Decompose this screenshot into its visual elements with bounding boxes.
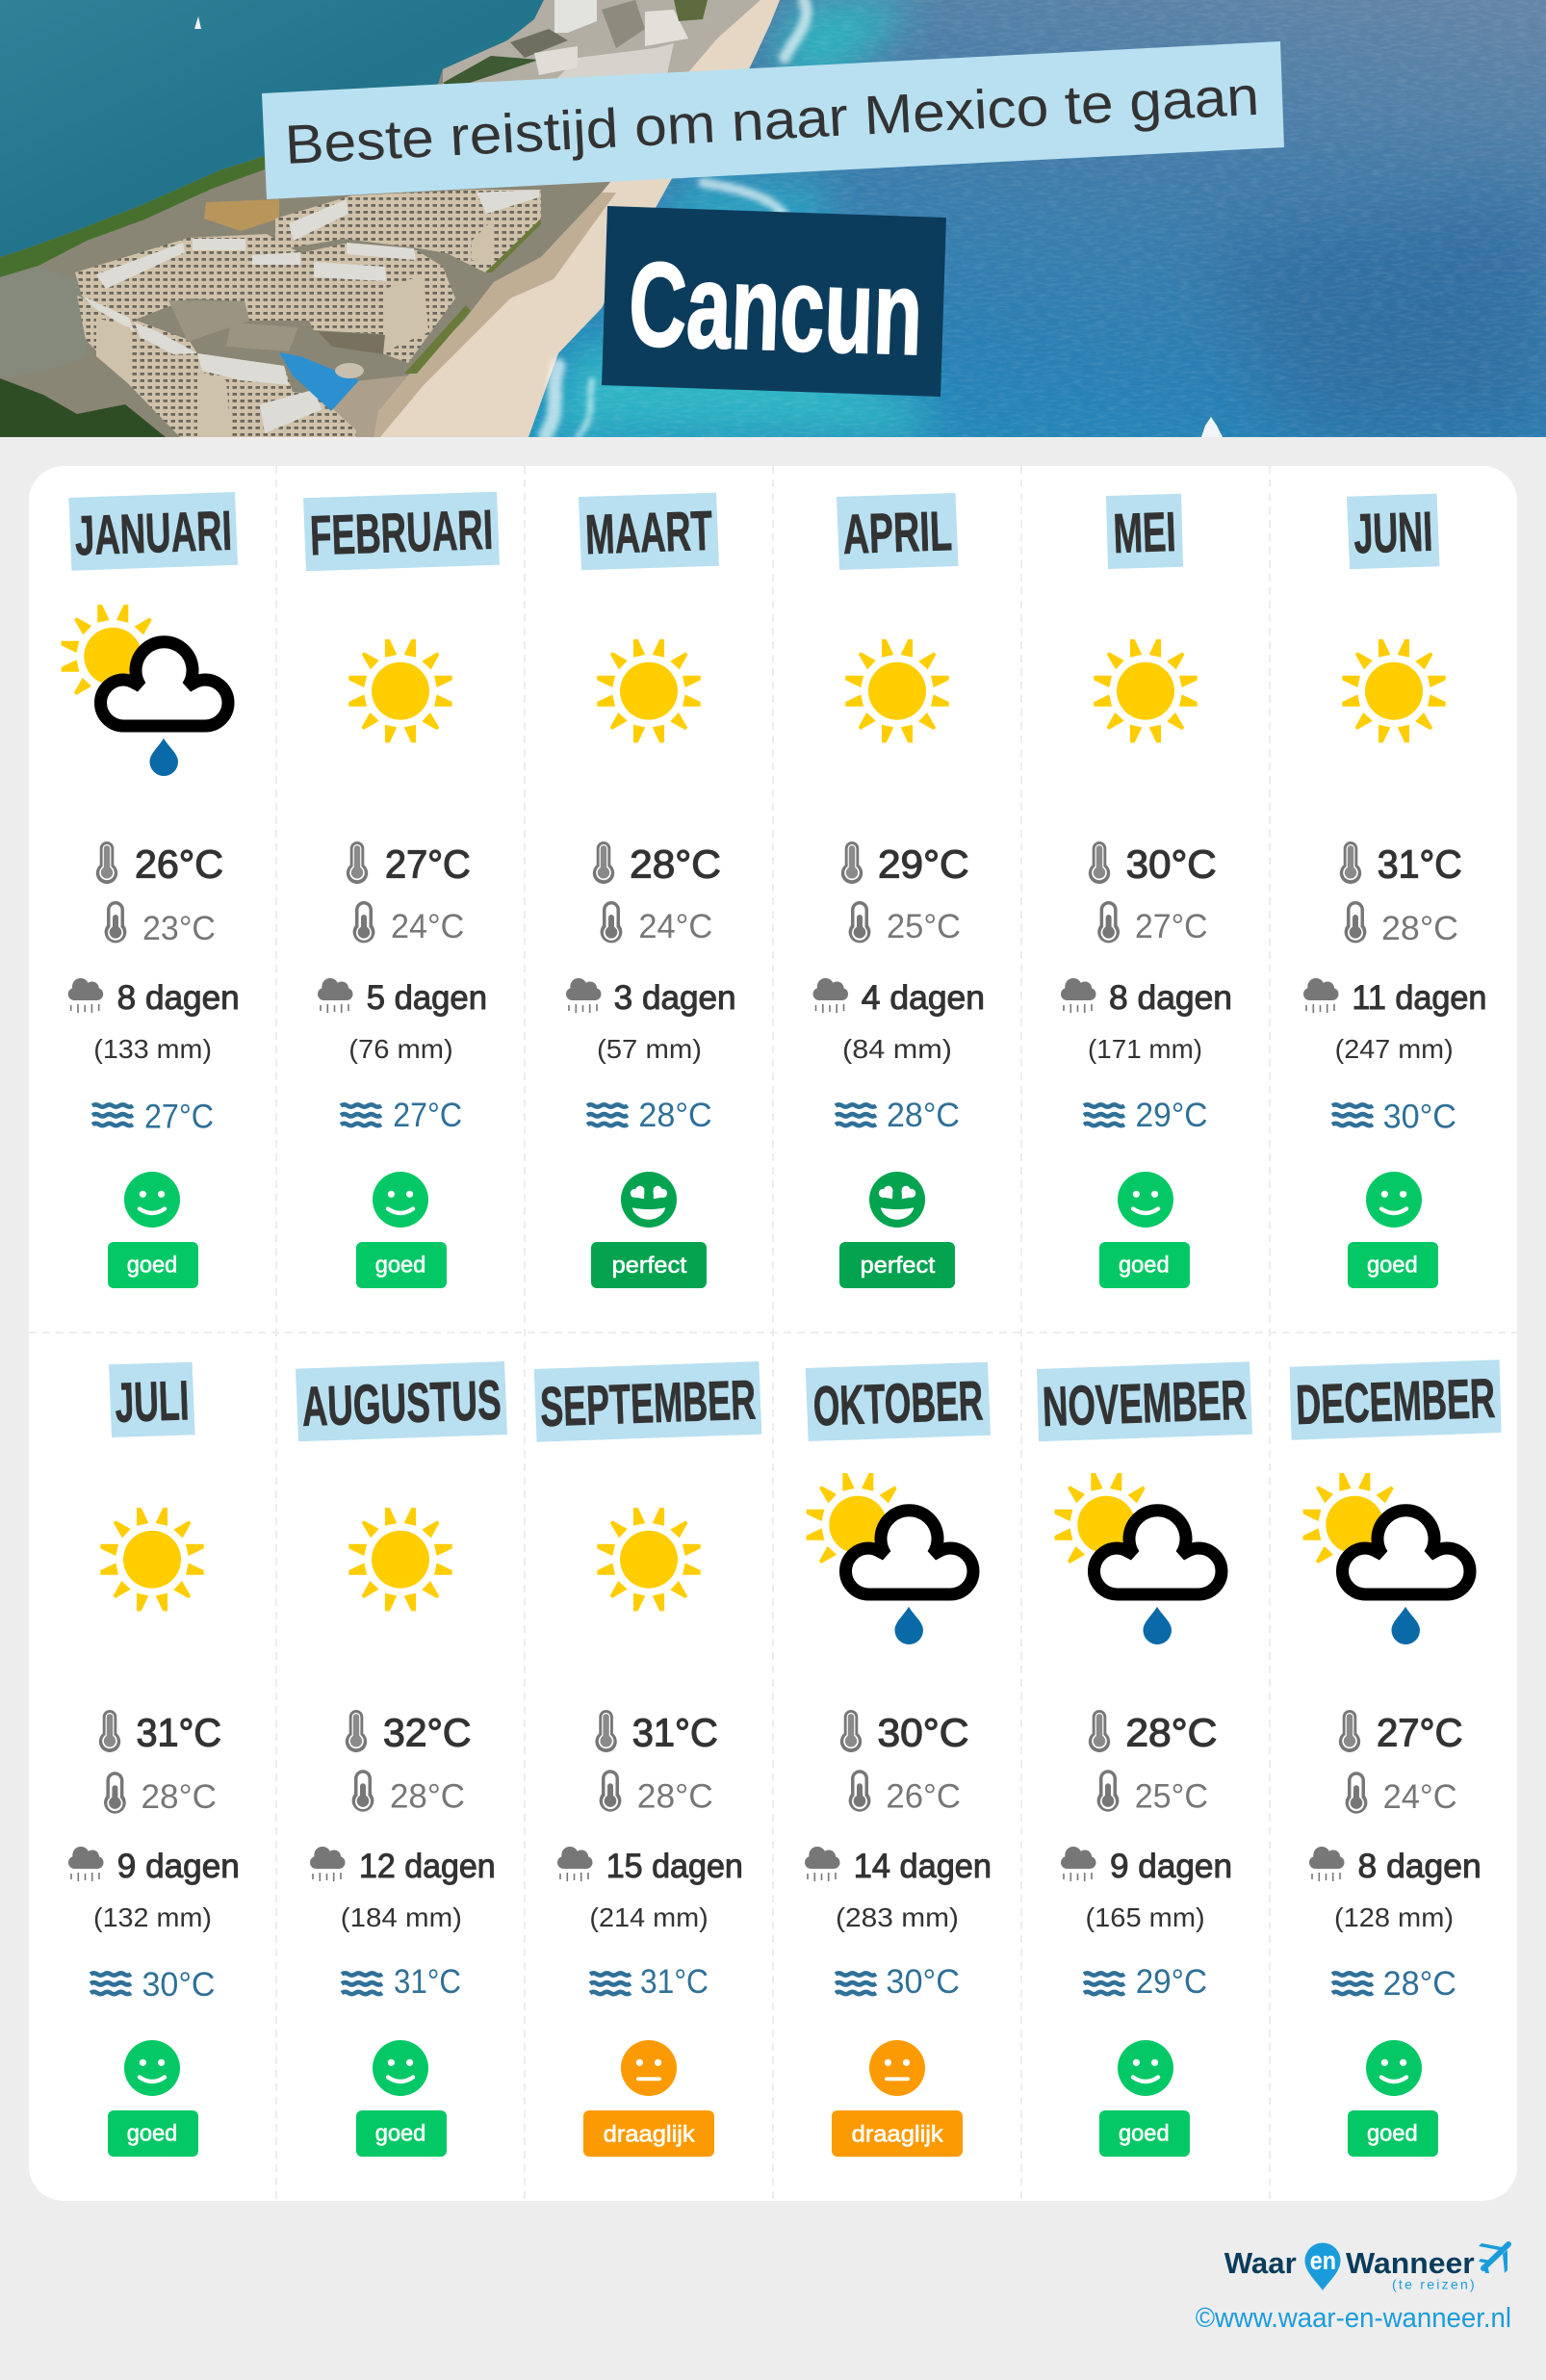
icon: rain days — [812, 978, 848, 1013]
icon: sea temperature — [1332, 1104, 1373, 1125]
logo: Waar en Wanneer te reizen — [1224, 2243, 1508, 2292]
min temperature: 24°C — [391, 908, 464, 945]
rating badge: perfect: perfect — [861, 1253, 936, 1279]
rain days: 8 dagen — [1109, 979, 1232, 1017]
min temperature: 25°C — [1135, 1777, 1208, 1816]
icon: max temperature — [1089, 841, 1110, 884]
rain days: 5 dagen — [367, 979, 487, 1017]
icon: max temperature — [346, 1710, 367, 1752]
max temperature: 30°C — [878, 1711, 968, 1755]
min temperature: 28°C — [141, 1778, 217, 1816]
icon: sun — [1094, 639, 1198, 742]
icon: sea temperature — [341, 1104, 381, 1125]
max temperature: 29°C — [878, 842, 969, 887]
icon: smiley good — [1366, 2040, 1422, 2096]
max temperature: 27°C — [1377, 1711, 1463, 1755]
month label: november — [1037, 1361, 1252, 1441]
month label: april: APRIL — [841, 500, 953, 566]
panel: white calendar card — [29, 466, 1517, 2201]
icon: sea temperature — [90, 1973, 131, 1994]
month label: augustus: AUGUSTUS — [300, 1369, 502, 1438]
copyright url: ©www.waar-en-wanneer.nl — [1196, 2303, 1511, 2334]
max temperature: 27°C — [385, 842, 471, 887]
panel: februari — [303, 492, 500, 1288]
rain days: 14 dagen — [854, 1848, 992, 1885]
icon: sun — [100, 1508, 204, 1611]
sea temperature: 29°C — [1136, 1097, 1207, 1134]
max temperature: 31°C — [137, 1711, 221, 1755]
rainfall: (76 mm) — [348, 1034, 453, 1064]
max temperature: 31°C — [1378, 842, 1462, 887]
rating badge: goed — [1348, 1242, 1438, 1288]
icon: rain days — [318, 978, 352, 1013]
rain days: 9 dagen — [1110, 1848, 1232, 1885]
sea temperature: 30°C — [142, 1966, 216, 2004]
panel: november — [1037, 1361, 1252, 2157]
max temperature: 30°C — [1126, 842, 1217, 887]
icon: sea temperature — [590, 1973, 631, 1994]
icon: rain days — [557, 1847, 593, 1881]
icon: min temperature — [600, 1770, 621, 1812]
month label: september: SEPTEMBER — [539, 1369, 757, 1438]
icon: rain days — [1309, 1847, 1344, 1881]
icon: min temperature — [849, 1770, 870, 1812]
header photo: aerial view of Cancun hotel zone and sea — [0, 0, 1546, 437]
min temperature: 23°C — [142, 910, 216, 947]
icon: min temperature — [849, 901, 870, 943]
icon: sun with rain cloud — [1303, 1473, 1470, 1644]
rating badge: goed: goed — [375, 2121, 425, 2147]
icon: max temperature — [593, 841, 614, 884]
icon: sea temperature — [92, 1104, 133, 1125]
rating badge: goed: goed — [1367, 1253, 1418, 1279]
icon: max temperature — [1089, 1710, 1110, 1752]
rain days: 15 dagen — [606, 1848, 743, 1885]
month label: mei — [1106, 494, 1183, 569]
month label: augustus — [296, 1361, 507, 1441]
min temperature: 28°C — [390, 1777, 465, 1816]
sea temperature: 30°C — [886, 1963, 960, 2001]
rainfall: (132 mm) — [93, 1902, 212, 1932]
icon: smiley perfect — [621, 1172, 677, 1228]
rainfall: (128 mm) — [1334, 1902, 1454, 1932]
sea temperature: 31°C — [640, 1963, 709, 2001]
icon: rain days — [68, 978, 103, 1013]
icon: min temperature — [353, 901, 374, 943]
sea temperature: 27°C — [393, 1097, 462, 1134]
icon: smiley good — [1118, 2040, 1173, 2096]
rating badge: draaglijk — [832, 2110, 963, 2157]
icon: sun with rain cloud — [807, 1473, 973, 1644]
rating badge: perfect: perfect — [612, 1253, 687, 1279]
icon: smiley neutral — [869, 2040, 925, 2096]
icon: min temperature — [1345, 901, 1366, 943]
icon: smiley good — [1366, 1172, 1422, 1228]
icon: airplane — [1479, 2243, 1508, 2273]
icon: sun with rain cloud — [62, 605, 228, 776]
panel: mei — [1061, 494, 1232, 1288]
icon: max temperature — [99, 1710, 120, 1752]
rainfall: (247 mm) — [1335, 1034, 1454, 1064]
rating badge: goed — [1099, 2110, 1190, 2157]
title banner: Beste reistijd om naar Mexico te gaan — [283, 65, 1260, 176]
icon: rain days — [310, 1847, 345, 1881]
month label: februari: FEBRUARI — [309, 499, 494, 567]
icon: max temperature — [840, 1710, 862, 1752]
min temperature: 28°C — [637, 1777, 713, 1816]
rating badge: goed — [1099, 1242, 1190, 1288]
rating badge: draaglijk: draaglijk — [604, 2121, 696, 2147]
month label: april — [837, 493, 959, 570]
icon: smiley perfect — [869, 1172, 925, 1228]
min temperature: 27°C — [1135, 908, 1207, 945]
sea temperature: 29°C — [1136, 1963, 1207, 2001]
rainfall: (283 mm) — [836, 1902, 959, 1932]
max temperature: 28°C — [1125, 1711, 1217, 1755]
month label: februari — [303, 492, 500, 571]
icon: max temperature — [595, 1710, 617, 1752]
sea temperature: 28°C — [887, 1097, 960, 1134]
min temperature: 28°C — [1381, 910, 1458, 947]
month label: september — [534, 1361, 761, 1442]
icon: sea temperature — [342, 1973, 382, 1994]
month label: juni — [1347, 494, 1440, 569]
month label: juli — [109, 1362, 195, 1437]
panel: oktober — [805, 1362, 992, 2157]
rating badge: draaglijk — [583, 2110, 714, 2157]
min temperature: 25°C — [887, 908, 961, 945]
month label: oktober: OKTOBER — [812, 1369, 984, 1437]
rain days: 3 dagen — [614, 979, 736, 1017]
icon: sun — [597, 1508, 701, 1611]
month label: maart — [579, 493, 719, 570]
icon: min temperature — [1346, 1772, 1367, 1814]
rating badge: goed: goed — [127, 1253, 177, 1279]
month label: oktober — [806, 1362, 991, 1441]
icon: sea temperature — [1084, 1104, 1124, 1125]
panel: juli — [68, 1362, 240, 2157]
month label: juli: JULI — [114, 1369, 190, 1435]
rainfall: (184 mm) — [341, 1902, 462, 1932]
panel: september — [534, 1361, 761, 2157]
min temperature: 24°C — [638, 908, 712, 945]
max temperature: 32°C — [383, 1711, 472, 1755]
icon: max temperature — [96, 841, 117, 884]
icon: max temperature — [841, 841, 863, 884]
sea temperature: 28°C — [1383, 1965, 1456, 2003]
rating badge: perfect — [839, 1242, 955, 1288]
rain days: 11 dagen — [1352, 979, 1486, 1017]
icon: rain days — [805, 1847, 839, 1881]
rating badge: goed: goed — [1367, 2121, 1418, 2147]
month label: januari: JANUARI — [74, 500, 233, 567]
icon: min temperature — [1097, 901, 1120, 943]
icon: sun — [348, 639, 452, 742]
icon: smiley good — [124, 1172, 180, 1228]
rating badge: draaglijk: draaglijk — [852, 2121, 944, 2147]
city banner: Cancun: Cancun — [627, 238, 925, 380]
icon: rain days — [68, 1847, 104, 1881]
icon: sun — [1342, 639, 1446, 742]
icon: rain days — [1061, 1847, 1095, 1881]
rainfall: (57 mm) — [597, 1034, 702, 1064]
rainfall: (214 mm) — [589, 1902, 709, 1932]
rainfall: (133 mm) — [93, 1034, 212, 1064]
panel: april — [812, 493, 985, 1288]
rating badge: goed — [108, 1242, 198, 1288]
rainfall: (165 mm) — [1086, 1902, 1205, 1932]
rain days: 8 dagen — [117, 979, 240, 1017]
month label: januari — [68, 492, 238, 571]
rating badge: goed: goed — [127, 2121, 177, 2147]
rain days: 8 dagen — [1357, 1848, 1482, 1885]
icon: max temperature — [1340, 841, 1361, 884]
sea temperature: 27°C — [144, 1099, 214, 1136]
rating badge: goed: goed — [1119, 1253, 1170, 1279]
icon: min temperature — [104, 1772, 126, 1814]
rain days: 9 dagen — [117, 1848, 240, 1885]
icon: min temperature — [601, 901, 622, 943]
icon: sun — [597, 639, 701, 742]
rating badge: goed — [1348, 2110, 1438, 2157]
icon: max temperature — [1339, 1710, 1360, 1752]
max temperature: 26°C — [135, 842, 223, 887]
month label: maart: MAART — [584, 500, 713, 566]
min temperature: 24°C — [1383, 1778, 1457, 1816]
sea temperature: 30°C — [1383, 1099, 1456, 1136]
icon: sun — [845, 639, 949, 742]
rating badge: goed — [108, 2110, 198, 2157]
rating badge: goed: goed — [375, 1253, 425, 1279]
icon: smiley good — [373, 2040, 428, 2096]
icon: sun — [348, 1508, 452, 1611]
icon: rain days — [566, 978, 601, 1013]
logo: Waar en Wanneer te reizen: Waar — [1224, 2246, 1297, 2280]
rating badge: perfect — [591, 1242, 707, 1288]
month label: mei: MEI — [1112, 501, 1177, 565]
logo: Waar en Wanneer te reizen: (te reizen) — [1392, 2277, 1475, 2292]
icon: smiley good — [1118, 1172, 1173, 1228]
max temperature: 31°C — [632, 1711, 718, 1755]
icon: sea temperature — [1084, 1973, 1124, 1994]
rainfall: (84 mm) — [842, 1034, 952, 1064]
icon: max temperature — [347, 841, 368, 884]
rating badge: goed: goed — [1119, 2121, 1170, 2147]
icon: sea temperature — [587, 1104, 628, 1125]
icon: smiley good — [373, 1172, 428, 1228]
icon: rain days — [1061, 978, 1095, 1013]
rain days: 4 dagen — [862, 979, 985, 1017]
icon: sea temperature — [1332, 1973, 1373, 1994]
month label: november: NOVEMBER — [1042, 1369, 1248, 1438]
icon: min temperature — [352, 1770, 374, 1812]
icon: smiley neutral — [621, 2040, 677, 2096]
rating badge: goed — [356, 2110, 447, 2157]
min temperature: 26°C — [886, 1777, 961, 1816]
panel: januari — [62, 492, 240, 1288]
logo: Waar en Wanneer te reizen: Wanneer — [1346, 2246, 1475, 2280]
city banner: Cancun — [602, 206, 946, 397]
icon: map pin with en — [1305, 2243, 1340, 2290]
panel: maart — [566, 493, 736, 1288]
icon: rain days — [1303, 978, 1338, 1013]
max temperature: 28°C — [630, 842, 721, 887]
icon: min temperature — [1097, 1770, 1119, 1812]
icon: smiley good — [124, 2040, 180, 2096]
panel: juni — [1303, 494, 1486, 1288]
icon: map pin with en: en — [1310, 2246, 1336, 2275]
title banner — [262, 41, 1284, 199]
sea temperature: 31°C — [394, 1963, 461, 2001]
panel: augustus — [296, 1361, 507, 2157]
rainfall: (171 mm) — [1088, 1034, 1202, 1064]
sea temperature: 28°C — [638, 1097, 712, 1134]
icon: min temperature — [105, 901, 126, 943]
rain days: 12 dagen — [359, 1848, 496, 1885]
month label: juni: JUNI — [1353, 501, 1433, 565]
icon: sea temperature — [836, 1973, 876, 1994]
rating badge: goed — [356, 1242, 447, 1288]
icon: sun with rain cloud — [1055, 1473, 1222, 1644]
icon: sea temperature — [836, 1104, 876, 1125]
panel: december — [1290, 1359, 1502, 2157]
